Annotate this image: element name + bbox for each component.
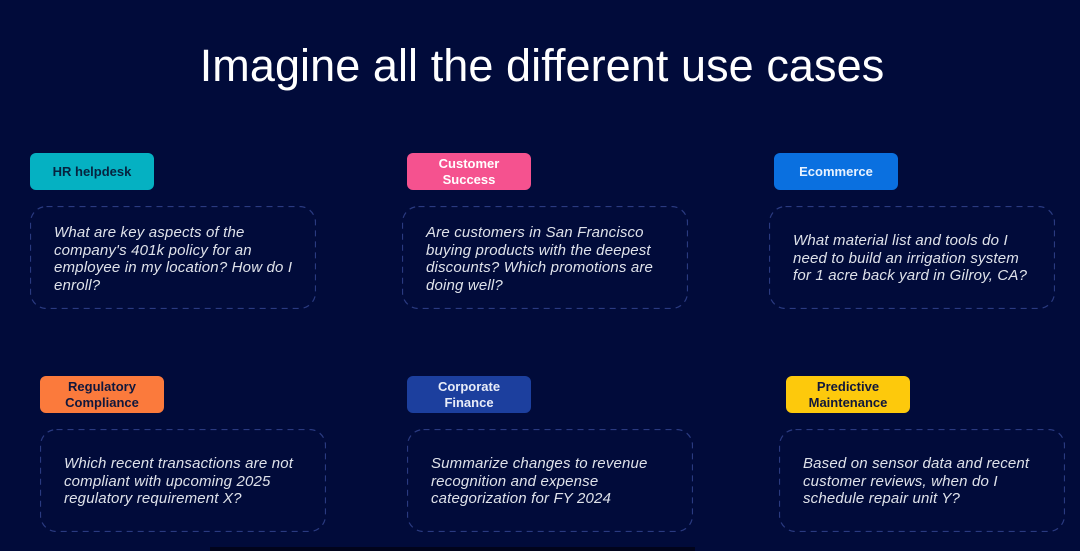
panel: Ecommerce question: need to build an irrigation system bbox=[793, 250, 1019, 266]
panel: Ecommerce question: What material list and tools do I bbox=[793, 232, 1008, 249]
panel: HR helpdesk question: enroll? bbox=[54, 276, 100, 294]
tag: HR helpdesk: HR helpdesk bbox=[53, 164, 131, 178]
panel: Regulatory Compliance question: regulatory requirement X? bbox=[64, 490, 242, 507]
tag: Customer Success bbox=[407, 153, 531, 190]
tag: Ecommerce bbox=[774, 153, 898, 190]
panel: Customer Success question bbox=[402, 206, 688, 309]
panel: Regulatory Compliance question bbox=[40, 429, 326, 532]
tag: Regulatory Compliance bbox=[40, 376, 164, 413]
panel: Regulatory Compliance question: Which recent transactions are not bbox=[64, 455, 293, 472]
panel: Ecommerce question bbox=[769, 206, 1055, 309]
tag: Ecommerce: Ecommerce bbox=[799, 164, 873, 178]
tag: Corporate Finance: Finance bbox=[444, 394, 494, 410]
tag: Corporate Finance bbox=[407, 376, 531, 413]
panel: Regulatory Compliance question: compliant with upcoming 2025 bbox=[64, 472, 271, 490]
panel: Predictive Maintenance question: Based on sensor data and recent bbox=[803, 455, 1029, 472]
panel: HR helpdesk question: company's 401k policy for an bbox=[54, 242, 252, 258]
panel: Customer Success question: doing well? bbox=[426, 276, 503, 294]
tag: Predictive Maintenance bbox=[786, 376, 910, 413]
panel: Predictive Maintenance question bbox=[779, 429, 1065, 532]
panel: Predictive Maintenance question: customer reviews, when do I bbox=[803, 472, 998, 490]
panel: Customer Success question: Are customers in San Francisco bbox=[426, 224, 644, 241]
tag: Regulatory Compliance: Compliance bbox=[65, 394, 139, 410]
panel: Corporate Finance question bbox=[407, 429, 693, 532]
panel: HR helpdesk question: employee in my location? How do I bbox=[54, 259, 292, 276]
title: Imagine all the different use cases bbox=[200, 40, 884, 91]
tag: Predictive Maintenance: Maintenance bbox=[809, 394, 887, 410]
panel: Customer Success question: buying products with the deepest bbox=[426, 242, 651, 258]
panel: Ecommerce question: for 1 acre back yard in Gilroy, CA? bbox=[793, 267, 1027, 284]
tag: Corporate Finance: Corporate bbox=[438, 378, 500, 394]
panel: Corporate Finance question: recognition and expense bbox=[431, 472, 598, 490]
panel: HR helpdesk question bbox=[30, 206, 316, 309]
panel: Predictive Maintenance question: schedule repair unit Y? bbox=[803, 490, 960, 507]
panel: Customer Success question: discounts? Which promotions are bbox=[426, 259, 653, 276]
tag: Predictive Maintenance: Predictive bbox=[817, 378, 879, 394]
panel: Corporate Finance question: Summarize changes to revenue bbox=[431, 455, 648, 472]
tag: Customer Success: Success bbox=[443, 172, 495, 186]
tag: HR helpdesk bbox=[30, 153, 154, 190]
panel: HR helpdesk question: What are key aspects of the bbox=[54, 224, 245, 241]
tag: Customer Success: Customer bbox=[439, 156, 499, 170]
panel: Corporate Finance question: categorization for FY 2024 bbox=[431, 490, 611, 507]
tag: Regulatory Compliance: Regulatory bbox=[68, 378, 136, 394]
